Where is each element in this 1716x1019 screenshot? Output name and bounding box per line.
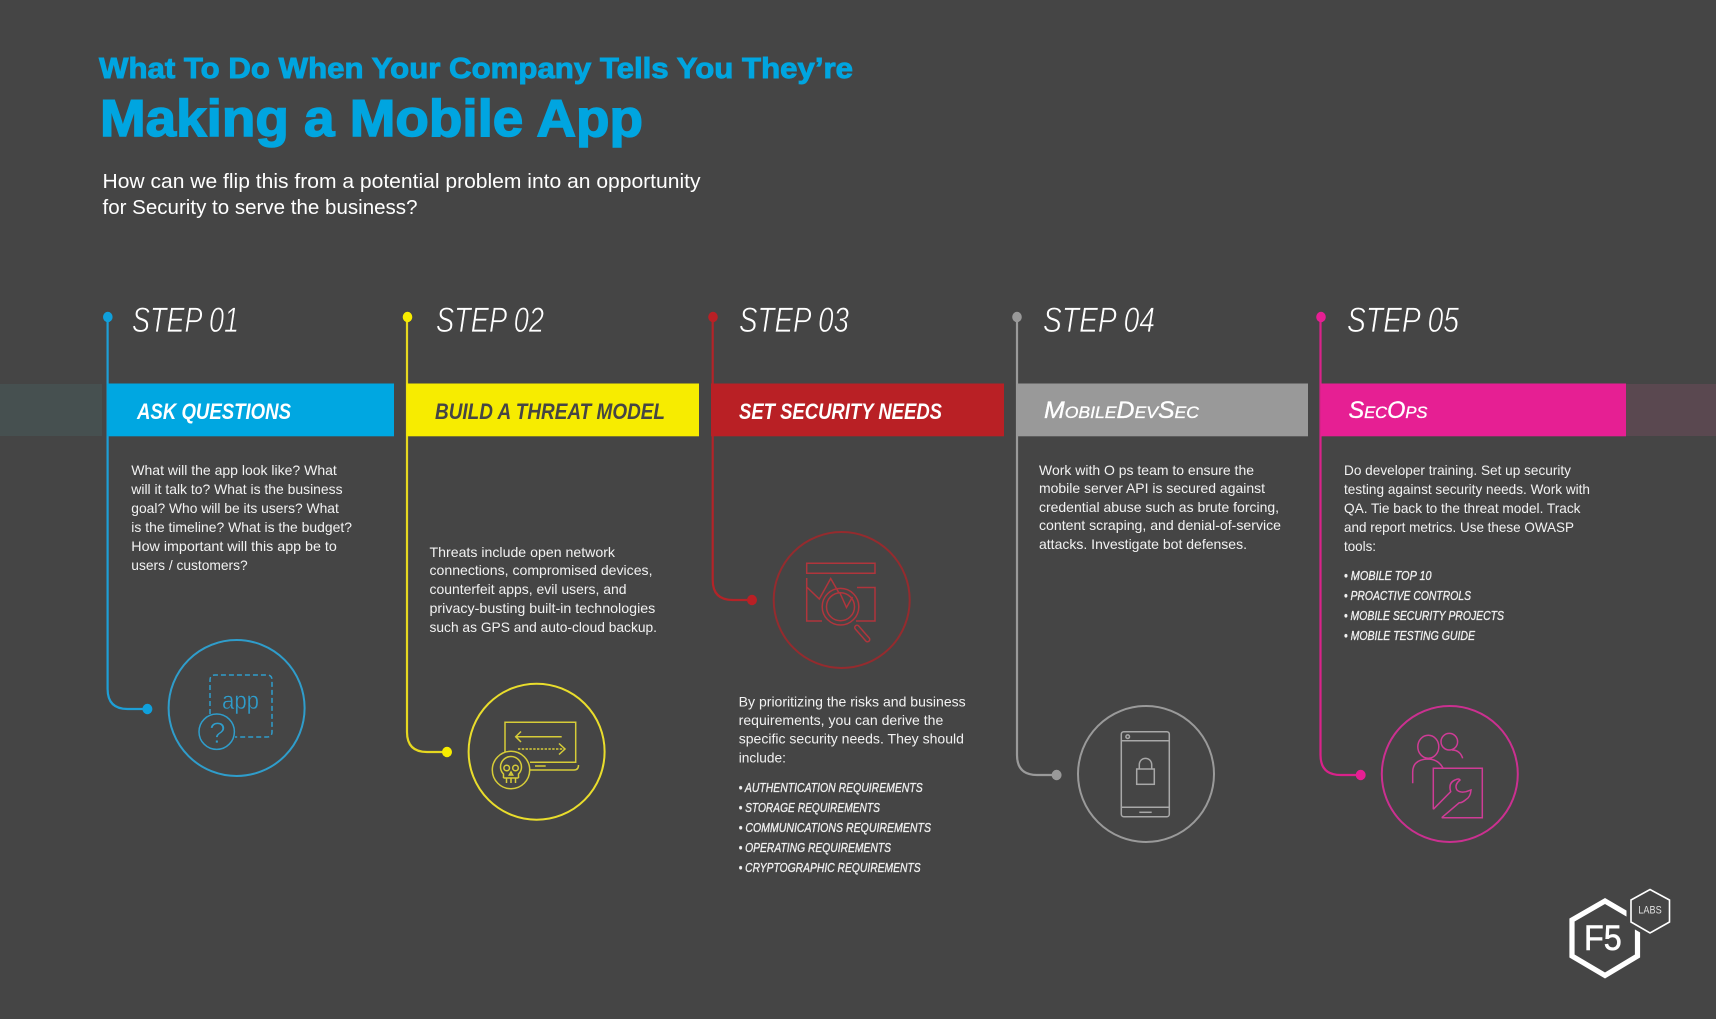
logo: F5 Labs: F5 bbox=[1584, 919, 1622, 958]
body text bbox=[1039, 462, 1281, 552]
icon: phone with lock bbox=[1078, 706, 1214, 842]
body text: such as GPS and auto-cloud backup. bbox=[430, 619, 657, 635]
subtitle: for Security to serve the business? bbox=[102, 196, 417, 219]
icon: app with question mark bbox=[169, 640, 305, 776]
body text: testing against security needs. Work with bbox=[1344, 481, 1590, 497]
panel: step 01 ask questions bbox=[103, 301, 394, 776]
panel: step 04 mobiledevsec bbox=[1012, 301, 1308, 842]
bullet list: • CRYPTOGRAPHIC REQUIREMENTS bbox=[739, 861, 921, 875]
body text bbox=[1344, 462, 1590, 554]
bullet list: • OPERATING REQUIREMENTS bbox=[739, 841, 892, 855]
step label: STEP 01 bbox=[132, 301, 239, 340]
body text: connections, compromised devices, bbox=[430, 562, 652, 578]
body text: credential abuse such as brute forcing, bbox=[1039, 499, 1279, 515]
heading bar bbox=[107, 384, 394, 436]
body text: include: bbox=[739, 750, 786, 766]
bullet list bbox=[739, 781, 932, 875]
body text: privacy-busting built-in technologies bbox=[430, 600, 655, 616]
icon: team with wrench bbox=[1382, 706, 1518, 842]
step label: STEP 02 bbox=[436, 301, 544, 340]
panel: step 03 set security needs bbox=[708, 301, 1004, 875]
logo: F5 Labs bbox=[1572, 890, 1670, 976]
step label: STEP 05 bbox=[1347, 301, 1459, 340]
heading bar bbox=[711, 384, 1004, 436]
connector line bbox=[103, 312, 152, 714]
body text: is the timeline? What is the budget? bbox=[131, 519, 352, 535]
heading bar: MobileDevSec bbox=[1044, 397, 1200, 424]
title: Making a Mobile App bbox=[100, 90, 643, 148]
title bbox=[99, 53, 853, 148]
connector line bbox=[1012, 312, 1062, 780]
heading bar: BUILD A THREAT MODEL bbox=[435, 399, 665, 424]
heading bar bbox=[1017, 384, 1308, 436]
body text: Work with O ps team to ensure the bbox=[1039, 462, 1254, 478]
body text bbox=[430, 544, 657, 635]
connector line bbox=[403, 312, 452, 757]
body text: content scraping, and denial-of-service bbox=[1039, 517, 1281, 533]
body text bbox=[130, 462, 352, 573]
heading bar bbox=[1321, 384, 1626, 436]
subtitle bbox=[102, 170, 701, 219]
connector line bbox=[708, 312, 757, 605]
logo: F5 Labs: LABS bbox=[1638, 904, 1662, 916]
body text: specific security needs. They should bbox=[739, 731, 964, 747]
body text bbox=[739, 693, 966, 766]
step label: STEP 04 bbox=[1043, 301, 1155, 340]
icon: app with question mark: app bbox=[222, 687, 259, 715]
panel: step 05 secops bbox=[1316, 301, 1626, 842]
bullet list: • AUTHENTICATION REQUIREMENTS bbox=[739, 781, 923, 795]
body text: What will the app look like? What bbox=[131, 462, 337, 478]
bullet list: • MOBILE TESTING GUIDE bbox=[1344, 629, 1476, 643]
body text: mobile server API is secured against bbox=[1039, 480, 1265, 496]
body text: goal? Who will be its users? What bbox=[131, 500, 339, 516]
subtitle: How can we flip this from a potential problem into an opportunity bbox=[102, 170, 701, 193]
bullet list: • PROACTIVE CONTROLS bbox=[1344, 589, 1472, 603]
bullet list: • COMMUNICATIONS REQUIREMENTS bbox=[739, 821, 932, 835]
icon: app with question mark: ? bbox=[209, 717, 226, 750]
heading bar: SET SECURITY NEEDS bbox=[739, 399, 942, 424]
bullet list: • MOBILE TOP 10 bbox=[1344, 569, 1432, 583]
body text: QA. Tie back to the threat model. Track bbox=[1344, 500, 1581, 516]
heading bar: ASK QUESTIONS bbox=[136, 399, 291, 424]
panel: step 02 build a threat model bbox=[403, 301, 699, 820]
body text: Do developer training. Set up security bbox=[1344, 462, 1571, 478]
icon: laptop with skull bbox=[469, 684, 605, 820]
body text: will it talk to? What is the business bbox=[130, 481, 343, 497]
title: What To Do When Your Company Tells You They’re bbox=[99, 53, 853, 85]
body text: How important will this app be to bbox=[131, 538, 337, 554]
connector line bbox=[1316, 312, 1366, 780]
body text: counterfeit apps, evil users, and bbox=[430, 581, 626, 597]
body text: users / customers? bbox=[131, 557, 248, 573]
step label: STEP 03 bbox=[739, 301, 849, 340]
body text: attacks. Investigate bot defenses. bbox=[1039, 536, 1247, 552]
icon: window with magnifier bbox=[774, 532, 910, 668]
heading bar bbox=[406, 384, 699, 436]
body text: Threats include open network bbox=[430, 544, 616, 560]
heading bar: SecOps bbox=[1348, 397, 1428, 424]
body text: tools: bbox=[1344, 538, 1376, 554]
bullet list: • MOBILE SECURITY PROJECTS bbox=[1344, 609, 1505, 623]
body text: and report metrics. Use these OWASP bbox=[1344, 519, 1574, 535]
bullet list bbox=[1344, 569, 1505, 643]
body text: By prioritizing the risks and business bbox=[739, 693, 966, 709]
bullet list: • STORAGE REQUIREMENTS bbox=[739, 801, 881, 815]
body text: requirements, you can derive the bbox=[739, 712, 944, 728]
